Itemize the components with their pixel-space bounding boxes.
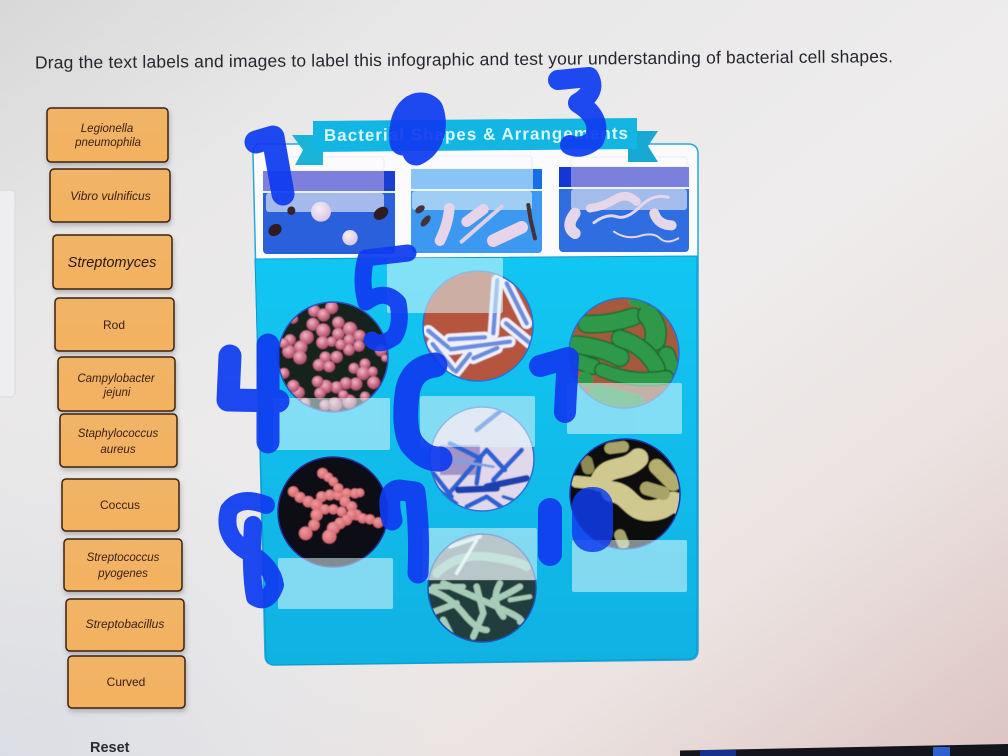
label: Rod	[55, 298, 174, 351]
reset button: Reset	[90, 740, 130, 756]
label: Streptomyces: Streptomyces	[68, 255, 156, 271]
shape panel: bacillus	[411, 156, 542, 253]
label: Campylobacter jejuni: jejuni	[102, 387, 131, 399]
handwritten 5	[363, 253, 408, 343]
label: Campylobacter jejuni	[58, 357, 175, 411]
circle outline: Campylobacter	[570, 439, 680, 549]
circle outline: Streptococcus	[278, 457, 388, 567]
title banner: Bacterial Shapes & Arrangements	[324, 124, 628, 145]
label: Streptomyces	[53, 235, 172, 289]
label: Coccus	[62, 479, 179, 531]
label: Streptococcus pyogenes: Streptococcus	[87, 552, 160, 564]
label: Streptobacillus: Streptobacillus	[86, 617, 164, 631]
label: Streptococcus pyogenes	[64, 539, 182, 591]
handwritten numbers	[227, 77, 613, 599]
photo: Vibrio vulnificus	[570, 298, 678, 408]
label: Legionella pneumophila: Legionella	[81, 123, 133, 135]
label: Curved: Curved	[107, 675, 145, 689]
label: Streptobacillus	[66, 599, 184, 651]
circle outline: Streptobacillus	[428, 534, 536, 642]
handwritten 2	[403, 106, 432, 152]
photo: Streptomyces	[431, 408, 534, 510]
shape panel: coccus	[263, 157, 395, 254]
handwritten 8	[227, 501, 275, 599]
circle outline: Vibrio	[569, 298, 679, 408]
handwritten 4	[228, 345, 278, 442]
title banner	[313, 118, 637, 152]
circle outline: Streptomyces	[430, 407, 534, 511]
shape panel: curved	[559, 157, 689, 252]
drop zones	[273, 258, 687, 609]
instruction heading: Drag the text labels and images to label this infographic and test your understanding of bacterial cell shapes.	[35, 46, 893, 72]
photo: Legionella pneumophila	[424, 272, 532, 380]
label: Staphylococcus aureus: aureus	[100, 444, 136, 456]
photo: Staphylococcus aureus	[279, 302, 388, 412]
handwritten 9	[390, 490, 419, 573]
handwritten 0 blob	[572, 487, 613, 552]
handwritten C	[406, 365, 440, 459]
panel frame	[253, 144, 698, 665]
handwritten 1 second digit	[538, 510, 562, 554]
label: Vibro vulnificus	[50, 169, 170, 222]
label: Legionella pneumophila	[47, 108, 168, 162]
label: Coccus: Coccus	[100, 498, 140, 512]
banner tails	[292, 135, 323, 165]
label: Rod: Rod	[103, 318, 125, 332]
label: Streptococcus pyogenes: pyogenes	[97, 568, 148, 580]
photo: Streptobacillus	[428, 534, 536, 642]
label: Legionella pneumophila: pneumophila	[74, 137, 141, 149]
label: Curved	[68, 656, 185, 708]
label: Campylobacter jejuni: Campylobacter	[77, 373, 156, 385]
handwritten 7	[540, 358, 568, 412]
photo: Campylobacter jejuni	[570, 440, 680, 548]
label: Staphylococcus aureus: Staphylococcus	[78, 428, 159, 440]
label tray	[47, 108, 185, 708]
circle outline: Legionella	[423, 271, 533, 381]
label: Vibro vulnificus: Vibro vulnificus	[70, 189, 151, 203]
label: Staphylococcus aureus	[60, 414, 177, 467]
circle outline: Staphylococcus	[278, 302, 388, 412]
handwritten 1	[256, 137, 283, 194]
handwritten 3	[558, 77, 596, 147]
infographic panel	[253, 118, 698, 665]
photo: Streptococcus pyogenes	[278, 458, 387, 566]
cyan background	[255, 256, 697, 665]
